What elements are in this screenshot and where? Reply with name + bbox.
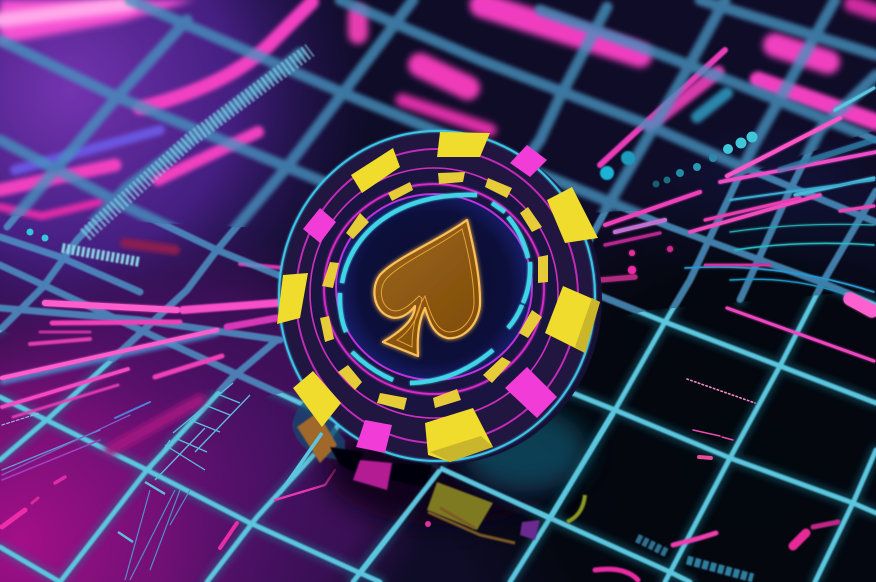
inner yellow dashes	[320, 172, 548, 410]
cyan circuit ladder	[118, 383, 250, 580]
outer yellow blocks	[277, 132, 600, 462]
purple glint and olive arc	[520, 520, 540, 540]
outer cyan rim	[279, 131, 595, 461]
brown streaks	[428, 508, 515, 543]
lower-right small neon marks	[595, 379, 838, 580]
beaded tech strips and cyan dots	[26, 50, 758, 578]
poker chip	[277, 131, 602, 464]
black wedges	[330, 447, 363, 475]
blue halo and brown block	[292, 398, 345, 460]
right burst of speed lines	[600, 88, 876, 361]
spade emblem	[374, 220, 480, 356]
near sharp grid	[0, 292, 876, 582]
inner dark disc	[336, 194, 532, 380]
grid segment beside the chip	[280, 433, 322, 493]
yellow block side faces	[430, 298, 600, 462]
outer magenta blocks	[303, 145, 557, 453]
chip edge	[286, 134, 602, 464]
cyan ring arcs	[340, 195, 530, 383]
far pink light streaks, behind grid	[0, 0, 876, 268]
middle grid	[0, 132, 876, 395]
yellow block reflection	[427, 482, 493, 530]
far blurred grid	[0, 0, 876, 228]
teal reflection	[463, 408, 587, 492]
left burst of speed lines	[2, 303, 335, 548]
chip face	[279, 131, 595, 461]
foreground grid bits over reflection	[360, 413, 613, 573]
chip reflection on floor	[280, 398, 613, 573]
dark floor shadow	[325, 415, 565, 525]
near grid halo	[0, 291, 876, 582]
magenta block reflection	[353, 460, 392, 490]
